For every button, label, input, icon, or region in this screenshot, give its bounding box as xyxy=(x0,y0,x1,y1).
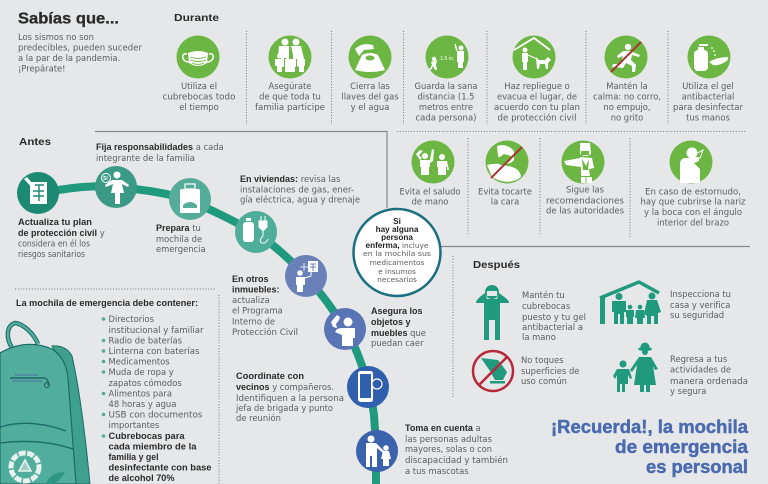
label xyxy=(494,81,580,122)
icon: face mask xyxy=(176,36,220,78)
label: riesgos sanitarios xyxy=(18,249,85,259)
label: jefa de brigada y punto xyxy=(235,403,333,413)
label: Utiliza el xyxy=(181,81,217,91)
label: mochila de xyxy=(156,234,202,244)
item: cubrebocas xyxy=(162,36,236,112)
panel: mochila contents xyxy=(0,298,212,484)
label xyxy=(240,174,360,204)
step: viviendas xyxy=(235,174,360,253)
label: a tus mascotas xyxy=(405,466,469,476)
list: cada miembro de la xyxy=(108,442,198,452)
list: Directorios xyxy=(108,314,154,324)
text: Regresa a tus xyxy=(670,354,727,364)
text: casa y verifica xyxy=(670,300,730,310)
list: desinfectante con base xyxy=(108,462,212,472)
list: Linterna con baterías xyxy=(108,346,200,356)
label: Asegura los xyxy=(371,306,423,316)
label xyxy=(162,81,236,112)
list: importantes xyxy=(108,420,159,430)
icon: person with tag: SI xyxy=(103,176,108,182)
label: no empujo, xyxy=(603,102,651,112)
label xyxy=(341,81,399,112)
icon: crossed runner xyxy=(604,36,648,78)
icon: sneeze in elbow xyxy=(670,140,712,184)
list: 48 horas y agua xyxy=(108,399,176,409)
list: Medicamentos xyxy=(108,356,170,366)
label: calma: no corro, xyxy=(593,92,661,102)
label: acuerdo con tu plan xyxy=(494,102,580,112)
text xyxy=(521,355,579,386)
label: En viviendas: revisa las xyxy=(240,174,340,184)
label xyxy=(18,217,105,259)
text: su seguridad xyxy=(670,310,724,320)
label xyxy=(478,186,532,206)
label: mayores, solas o con xyxy=(405,444,492,454)
text: actividades de xyxy=(670,364,731,374)
item: llaves xyxy=(341,36,399,112)
label: Prepara tu xyxy=(156,223,201,233)
text: antibacterial a xyxy=(522,322,583,332)
label: Mantén la xyxy=(606,81,648,91)
intro text: predecibles, pueden suceder xyxy=(18,42,143,52)
intro: Sabías que xyxy=(18,10,143,74)
label: instalaciones de gas, ener- xyxy=(240,184,354,194)
label: Actualiza tu plan xyxy=(18,217,92,227)
text: y segura xyxy=(670,386,706,396)
heading: Durante: Durante xyxy=(174,12,219,24)
label xyxy=(156,223,206,254)
label: discapacidad y también xyxy=(405,455,508,465)
panel: Después xyxy=(473,259,748,396)
label: Evita tocarte xyxy=(478,186,532,196)
text: Mantén tu xyxy=(522,290,565,300)
heading: Antes: Antes xyxy=(19,136,51,148)
label: recomendaciones xyxy=(546,196,624,206)
label: para desinfectar xyxy=(673,102,744,112)
step: otros inmuebles xyxy=(232,255,327,337)
item: estornudo xyxy=(640,140,746,228)
label: tus manos xyxy=(686,112,730,122)
label: integrante de la familia xyxy=(96,153,195,163)
item: repliegue xyxy=(494,36,580,122)
label: y la boca con el ángulo xyxy=(644,207,742,217)
step: plan xyxy=(17,172,105,259)
step: toma en cuenta xyxy=(356,423,508,476)
label: Cierra las xyxy=(350,81,390,91)
item: sana distancia xyxy=(414,36,478,122)
callout: recuerda: de emergencia xyxy=(615,436,749,457)
list xyxy=(102,314,212,483)
list: USB con documentos xyxy=(108,410,202,420)
list: familia y gel xyxy=(108,452,158,462)
icon: house, person and dog xyxy=(512,36,556,78)
callout: persona enferma: medicamentos xyxy=(370,258,425,267)
label xyxy=(673,81,744,122)
intro text xyxy=(18,32,143,74)
label: el tiempo xyxy=(179,102,219,112)
label: hay que cubrirse la nariz xyxy=(640,196,746,206)
label: puedan caer xyxy=(371,338,424,348)
callout: persona enferma: e insumos xyxy=(378,267,416,276)
label: de protección civil y xyxy=(18,228,105,238)
icon: crossed face touch xyxy=(486,140,528,184)
icon: plan document xyxy=(17,172,59,214)
label xyxy=(593,81,661,122)
text xyxy=(522,290,586,342)
label: cubrebocas todo xyxy=(162,92,236,102)
icon: gas valve xyxy=(348,36,392,78)
text: puesto y tu gel xyxy=(522,312,586,322)
label: gía eléctrica, agua y drenaje xyxy=(240,194,360,204)
label: vecinos y compañeros. xyxy=(236,382,334,392)
step: objetos y muebles xyxy=(324,306,426,350)
label: Interno de xyxy=(232,316,275,326)
label: Evita el saludo xyxy=(400,186,460,196)
icon: adult and child xyxy=(356,430,398,472)
label xyxy=(96,142,224,163)
callout: persona enferma: persona xyxy=(381,233,413,242)
label xyxy=(400,186,460,206)
list: Radio de baterías xyxy=(108,336,182,346)
heading: Después xyxy=(473,259,520,271)
text xyxy=(670,289,731,320)
callout: persona enferma: enferma, incluye xyxy=(366,241,429,250)
label: de que toda tu xyxy=(259,92,321,102)
callout: recuerda: es personal xyxy=(646,456,748,477)
illustration: backpack xyxy=(0,323,90,484)
text: No toques xyxy=(521,355,564,365)
label xyxy=(414,81,478,122)
item: calma xyxy=(593,36,661,122)
list: zapatos cómodos xyxy=(108,378,182,388)
label: Toma en cuenta a xyxy=(405,423,481,433)
icon: do not touch surfaces xyxy=(473,351,513,391)
label: evacua el lugar, de xyxy=(497,92,577,102)
label: actualiza xyxy=(232,295,270,305)
step: responsabilidades xyxy=(95,142,224,208)
icon: family xyxy=(268,36,312,78)
text: cubrebocas xyxy=(522,301,570,311)
label: Identifiquen a la persona xyxy=(236,393,344,403)
intro text: a la par de la pandemia. xyxy=(18,53,120,63)
label: llaves del gas xyxy=(341,92,399,102)
label: las personas adultas xyxy=(405,434,492,444)
text: manera ordenada xyxy=(670,376,748,386)
list: Cubrebocas para xyxy=(108,431,186,441)
label: Fija responsabilidades a cada xyxy=(96,142,224,152)
label: antibacterial xyxy=(682,92,734,102)
label: distancia (1.5 xyxy=(417,92,475,102)
label: Coordinate con xyxy=(236,371,304,381)
label: de mano xyxy=(412,196,448,206)
label: no grito xyxy=(611,112,643,122)
step: vecinos xyxy=(235,366,389,423)
callout: persona enferma: necesarios xyxy=(377,275,417,284)
label: el Programa xyxy=(232,306,283,316)
label: Haz repliegue o xyxy=(504,81,570,91)
item: saludo xyxy=(400,140,460,206)
title: Sabías que... xyxy=(18,10,119,28)
label: la cara xyxy=(491,196,519,206)
callout: recuerda: ¡Recuerda!, la mochila xyxy=(551,416,749,437)
timeline path xyxy=(38,186,376,484)
intro text: ¡Prepárate! xyxy=(18,64,66,74)
label: de reunión xyxy=(236,413,281,423)
label: cada persona) xyxy=(416,112,476,122)
callout: persona enferma: hay alguna xyxy=(376,225,419,234)
icon: person with tool xyxy=(324,308,366,350)
label: Asegúrate xyxy=(269,81,311,91)
heading: La mochila de emergencia debe contener: xyxy=(16,298,198,308)
label xyxy=(546,184,624,216)
item: familia xyxy=(255,36,325,112)
label: En otros xyxy=(232,274,269,284)
list: institucional y familiar xyxy=(108,325,204,335)
list: Muda de ropa y xyxy=(108,367,174,377)
icon: authority pointing xyxy=(562,140,604,184)
icon: adult and child returning xyxy=(613,342,658,392)
label xyxy=(405,423,508,476)
text: uso común xyxy=(521,376,567,386)
icon: house with family xyxy=(600,282,661,324)
text xyxy=(670,354,748,396)
text: superficies de xyxy=(521,366,579,376)
label: familia participe xyxy=(255,102,325,112)
label: Guarda la sana xyxy=(414,81,478,91)
label: Utiliza el gel xyxy=(682,81,734,91)
icon: backpack xyxy=(169,178,211,220)
icon: gas tank and plug xyxy=(235,211,277,253)
list: Alimentos para xyxy=(108,388,172,398)
callout: persona enferma: Si xyxy=(393,217,401,226)
intro text: Los sismos no son xyxy=(18,32,94,42)
label xyxy=(232,274,298,337)
icon: phone xyxy=(347,366,389,408)
label: En caso de estornudo, xyxy=(645,186,741,196)
label xyxy=(371,306,426,348)
label: metros entre xyxy=(419,102,473,112)
label: inmuebles: xyxy=(232,284,280,294)
label: Sigue las xyxy=(566,184,604,194)
label xyxy=(235,371,344,423)
text: la mano xyxy=(522,332,556,342)
item: gel xyxy=(673,36,744,122)
label xyxy=(640,186,746,228)
label: y el agua xyxy=(351,102,389,112)
label: interior del brazo xyxy=(657,218,729,228)
callout: persona enferma xyxy=(354,209,440,296)
label xyxy=(255,81,325,112)
label: emergencia xyxy=(156,244,206,254)
label: de las autoridades xyxy=(546,206,624,216)
label: muebles que xyxy=(371,328,426,338)
text: Inspecciona tu xyxy=(670,289,731,299)
icon: distance: .1.5 m. xyxy=(439,56,454,62)
item: autoridades xyxy=(546,140,624,216)
step: mochila xyxy=(156,178,211,254)
label: considera en él los xyxy=(18,238,90,248)
icon: two people waving xyxy=(412,140,454,184)
icon: person with mask xyxy=(476,285,509,340)
icon: person with plan xyxy=(285,255,327,297)
callout: recuerda xyxy=(551,416,749,477)
label: Protección Civil xyxy=(232,327,298,337)
list: de alcohol 70% xyxy=(108,473,174,483)
item: tocarte la cara xyxy=(478,140,532,206)
icon: gel bottle xyxy=(688,36,730,78)
label: de protección civil xyxy=(498,112,576,122)
label: objetos y xyxy=(371,317,411,327)
callout: persona enferma: en la mochila sus xyxy=(363,249,431,258)
